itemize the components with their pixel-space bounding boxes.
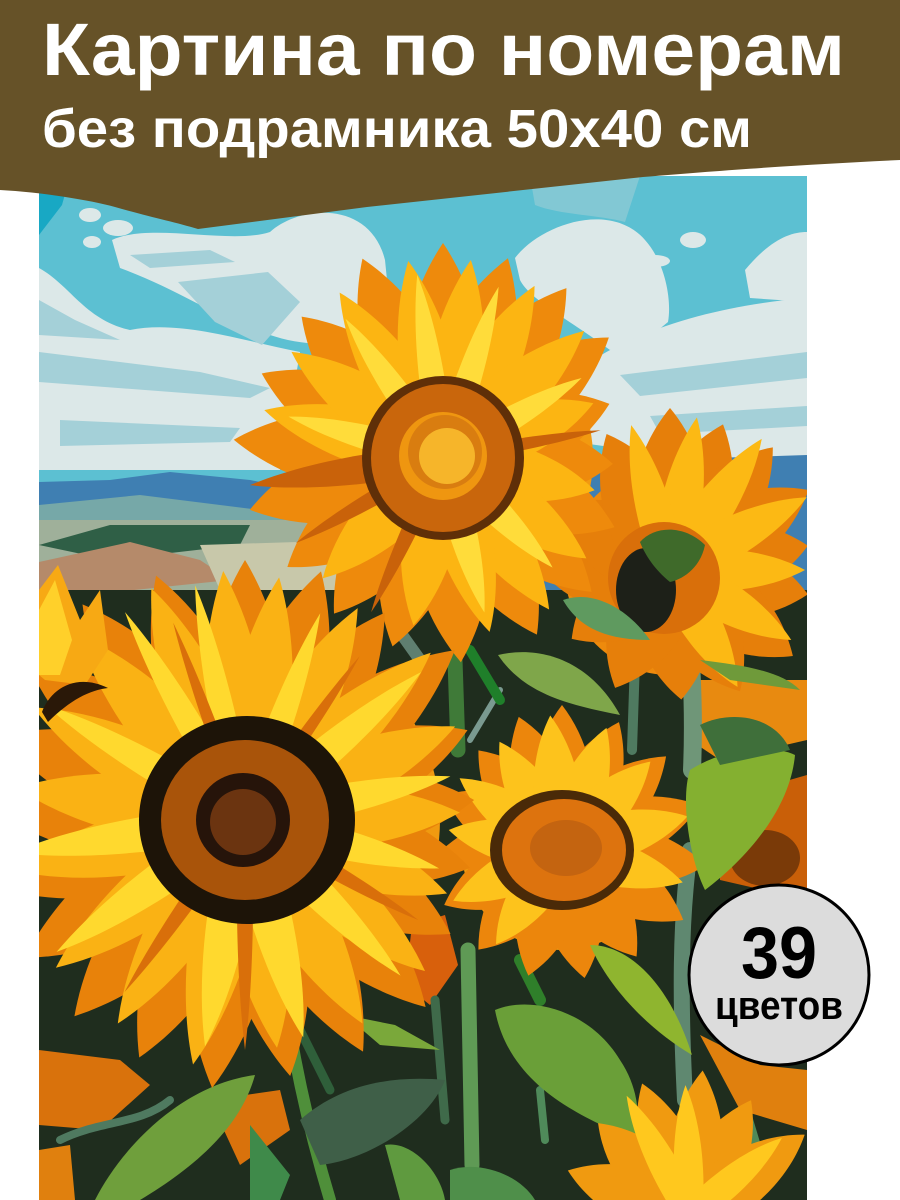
flower: top center sunflower	[230, 243, 634, 666]
badge: 39 colours: цветов	[715, 984, 843, 1028]
subtitle: без подрамника 50х40 см	[42, 99, 752, 159]
sky	[39, 176, 807, 506]
painting: sunflower field	[0, 176, 828, 1200]
dark foliage background	[39, 590, 807, 1200]
clouds	[39, 208, 807, 470]
title: Картина по номерам	[42, 8, 845, 91]
cloud shadows	[39, 250, 807, 446]
foliage texture	[60, 625, 760, 1175]
stems	[290, 585, 693, 1200]
leaves behind	[498, 597, 800, 715]
flower: back right sunflower	[555, 408, 807, 700]
flower: middle sunflower	[444, 705, 698, 978]
flower: large foreground sunflower	[39, 560, 474, 1088]
flower: bottom right sunflower	[568, 1070, 805, 1200]
orange background flowers	[39, 680, 807, 1200]
leaves front right	[95, 717, 795, 1200]
fields	[39, 520, 336, 590]
badge: 39 colours	[689, 885, 869, 1065]
flower: left partial sunflower	[39, 565, 108, 722]
header banner	[0, 0, 900, 229]
mountains	[39, 455, 807, 600]
badge: 39 colours: 39	[741, 913, 817, 994]
